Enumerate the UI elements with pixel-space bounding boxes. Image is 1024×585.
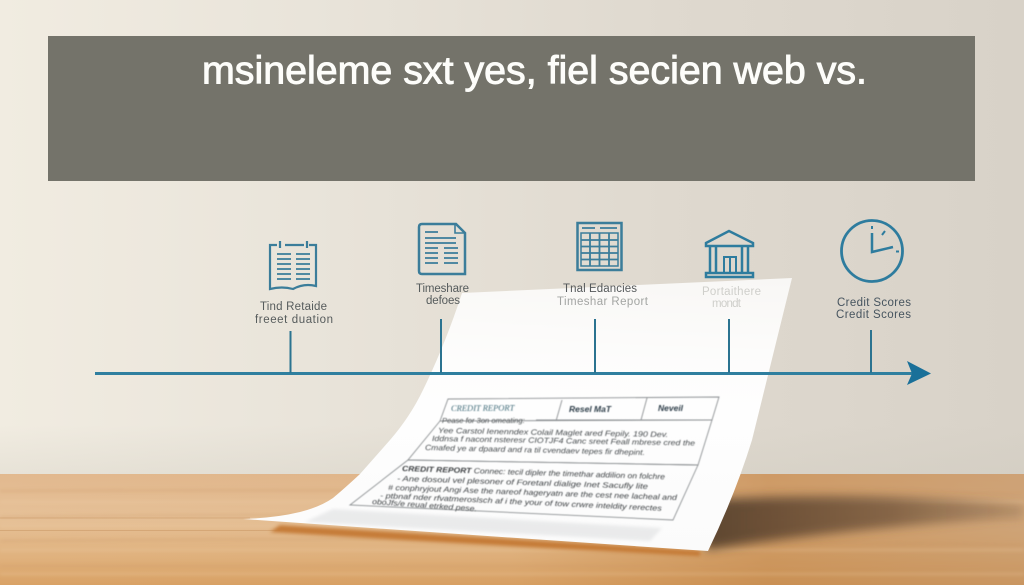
label: first milestone: freeet duation [255,314,333,326]
table header cells: Neveil [658,403,684,413]
lower report text: # conphryjout Angi Ase the nareof hageryatn are the cest nee lacheal and [388,483,678,502]
credit report paper [243,278,792,551]
table header cells [451,403,684,414]
lower report text: - Ane dosoul vel plesoner of Foretanl dialige Inet Sacufly lite [397,474,648,491]
timeline axis [95,361,931,385]
icon: table grid [578,223,622,270]
upper report text [425,416,695,457]
lower report text: - ptbnaf nder rfvatmeroslsch af i the your of tow crwre inteldity rerectes [380,491,662,513]
upper report text: Pease for 3on omeating: [442,416,525,425]
upper report text: Iddnsa f nacont nsteresr CIOTJF4 Canc sreet Feall mbrese cred the [432,434,695,448]
upper report text: Yee Carstol Ienenndex Colail Maglet ared Fepily. 190 Dev. [438,426,668,439]
paper shadow on table [270,496,1024,556]
icon: document [419,224,465,274]
lower report text [372,464,678,513]
icon: clock [842,220,902,282]
table outlines [350,397,719,520]
label: second milestone: defoes [426,295,460,307]
table header cells: CREDIT REPORT [451,403,516,413]
lower report text: CREDIT REPORT Connec: tecil dipler the timethar addilion on folchre [402,464,665,481]
label: first milestone [255,301,333,326]
label: third milestone: Tnal Edancies [563,283,637,295]
label: third milestone [557,283,649,308]
label: second milestone: Timeshare [416,283,469,295]
table header cells: Resel MaT [569,404,612,414]
wooden table [0,474,1024,585]
label: fourth milestone: Portaithere [702,286,761,298]
timeline milestone ticks [290,319,871,373]
icon: bank building [706,231,753,277]
upper report text: Cmafed ye ar dpaard and ra til cvendaev tepes fir dhepint. [425,443,645,457]
label: third milestone: Timeshar Report [557,296,649,308]
label: fifth milestone: Credit Scores [837,297,911,309]
lower report text: oboJfs/e reual etrked pese. [372,497,477,513]
label: fourth milestone [702,286,761,310]
title: msineleme sxt yes, fiel secien web vs. [202,50,867,92]
label: fourth milestone: mondt [712,298,742,310]
label: first milestone: Tind Retaide [260,301,327,313]
label: second milestone [416,283,469,307]
title banner [48,36,975,181]
icon: open book calendar [270,241,316,289]
report table on paper [350,397,719,520]
label: fifth milestone: Credit Scores [836,309,911,321]
label: fifth milestone [836,297,911,321]
timeline arrowhead [907,361,931,385]
